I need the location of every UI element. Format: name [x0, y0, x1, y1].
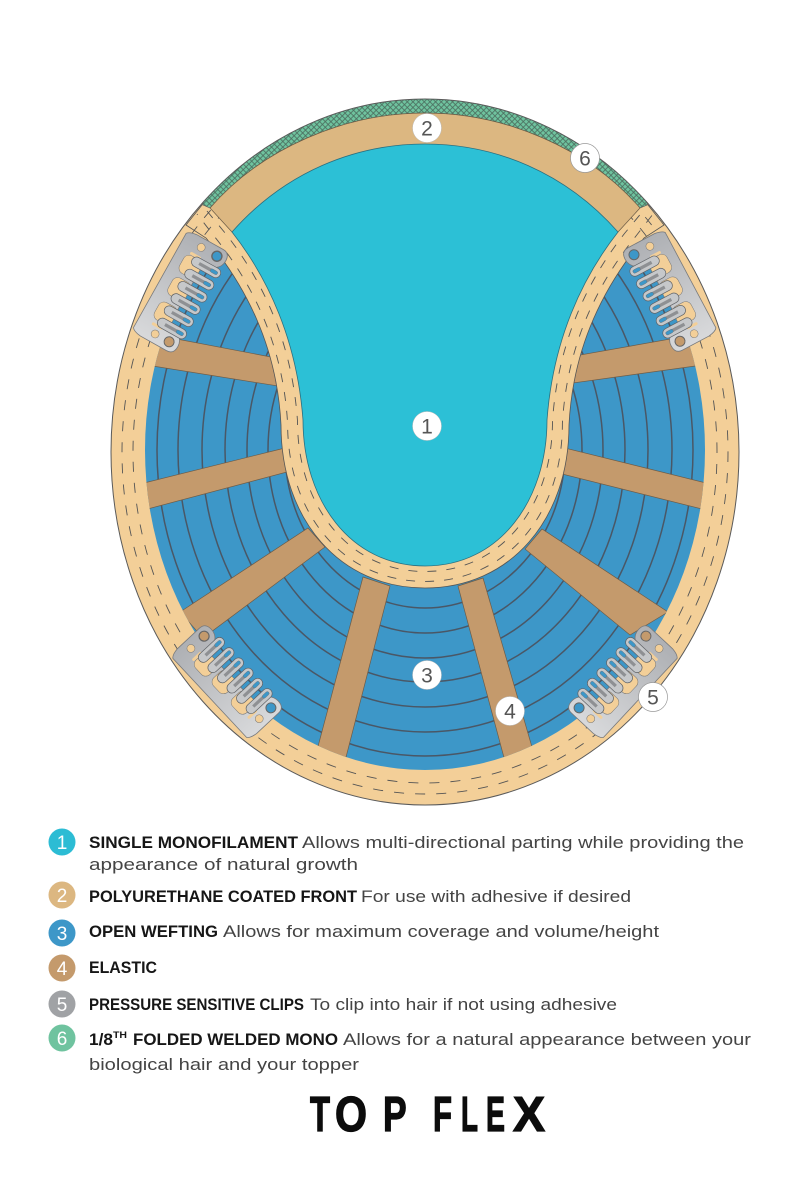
elastic bands	[140, 332, 710, 765]
legend	[48, 828, 751, 1074]
wig diagram	[111, 90, 739, 805]
polyurethane front band	[210, 113, 640, 232]
title: E	[486, 1088, 505, 1142]
legend item 1: 1	[57, 833, 67, 854]
legend item 3: OPEN WEFTING	[89, 922, 218, 941]
callout numbers: 6	[579, 148, 591, 170]
callout numbers: 2	[421, 118, 433, 140]
legend item 4: 4	[57, 959, 68, 980]
callout numbers	[412, 114, 668, 726]
outer outline	[111, 99, 739, 805]
legend item 3: Allows for maximum coverage and volume/height	[223, 922, 659, 941]
legend item 1: SINGLE MONOFILAMENT	[89, 833, 299, 852]
outer ring base	[111, 99, 739, 805]
callout numbers: 3	[421, 664, 433, 688]
title: P	[383, 1088, 406, 1142]
legend item 1: Allows multi-directional parting while providing the	[302, 833, 744, 852]
legend item 5	[48, 990, 617, 1018]
title: O	[335, 1088, 367, 1142]
legend item 5: To clip into hair if not using adhesive	[310, 995, 617, 1014]
folded welded mono mesh	[202, 100, 648, 208]
legend item 3	[48, 920, 659, 946]
clip: top right	[619, 229, 718, 355]
single monofilament	[232, 144, 618, 566]
open wefting panel	[145, 262, 705, 770]
U-shaped light band	[122, 90, 728, 794]
callout numbers: 4	[504, 700, 516, 724]
clip: top left	[132, 230, 232, 355]
ring stitching	[122, 210, 728, 794]
legend item 2: 2	[57, 886, 67, 907]
band stitching	[197, 211, 653, 581]
callout numbers: 5	[647, 686, 659, 710]
legend item 6: 1/8	[89, 1030, 113, 1049]
legend item 6: 6	[57, 1029, 67, 1050]
legend item 1: appearance of natural growth	[89, 855, 358, 874]
legend item 4	[48, 954, 157, 982]
legend item 6	[48, 1024, 751, 1074]
clip: bottom left	[170, 621, 286, 740]
legend item 3: 3	[57, 924, 67, 945]
legend item 1	[48, 828, 744, 874]
clip: bottom right	[564, 621, 680, 740]
legend item 6: TH	[113, 1030, 127, 1040]
callout numbers: 1	[421, 416, 433, 438]
legend item 4: ELASTIC	[89, 958, 157, 977]
legend item 6: Allows for a natural appearance between your	[343, 1030, 751, 1049]
legend item 5: 5	[57, 995, 67, 1016]
title: F	[433, 1088, 452, 1142]
legend item 6: biological hair and your topper	[89, 1055, 359, 1074]
title: T	[310, 1088, 330, 1142]
legend item 2: For use with adhesive if desired	[361, 887, 631, 906]
legend item 6: FOLDED WELDED MONO	[133, 1030, 338, 1049]
legend item 2: POLYURETHANE COATED FRONT	[89, 887, 358, 906]
title: L	[461, 1088, 478, 1142]
legend item 5: PRESSURE SENSITIVE CLIPS	[89, 995, 304, 1014]
title: X	[513, 1088, 545, 1142]
legend item 2	[48, 882, 631, 908]
